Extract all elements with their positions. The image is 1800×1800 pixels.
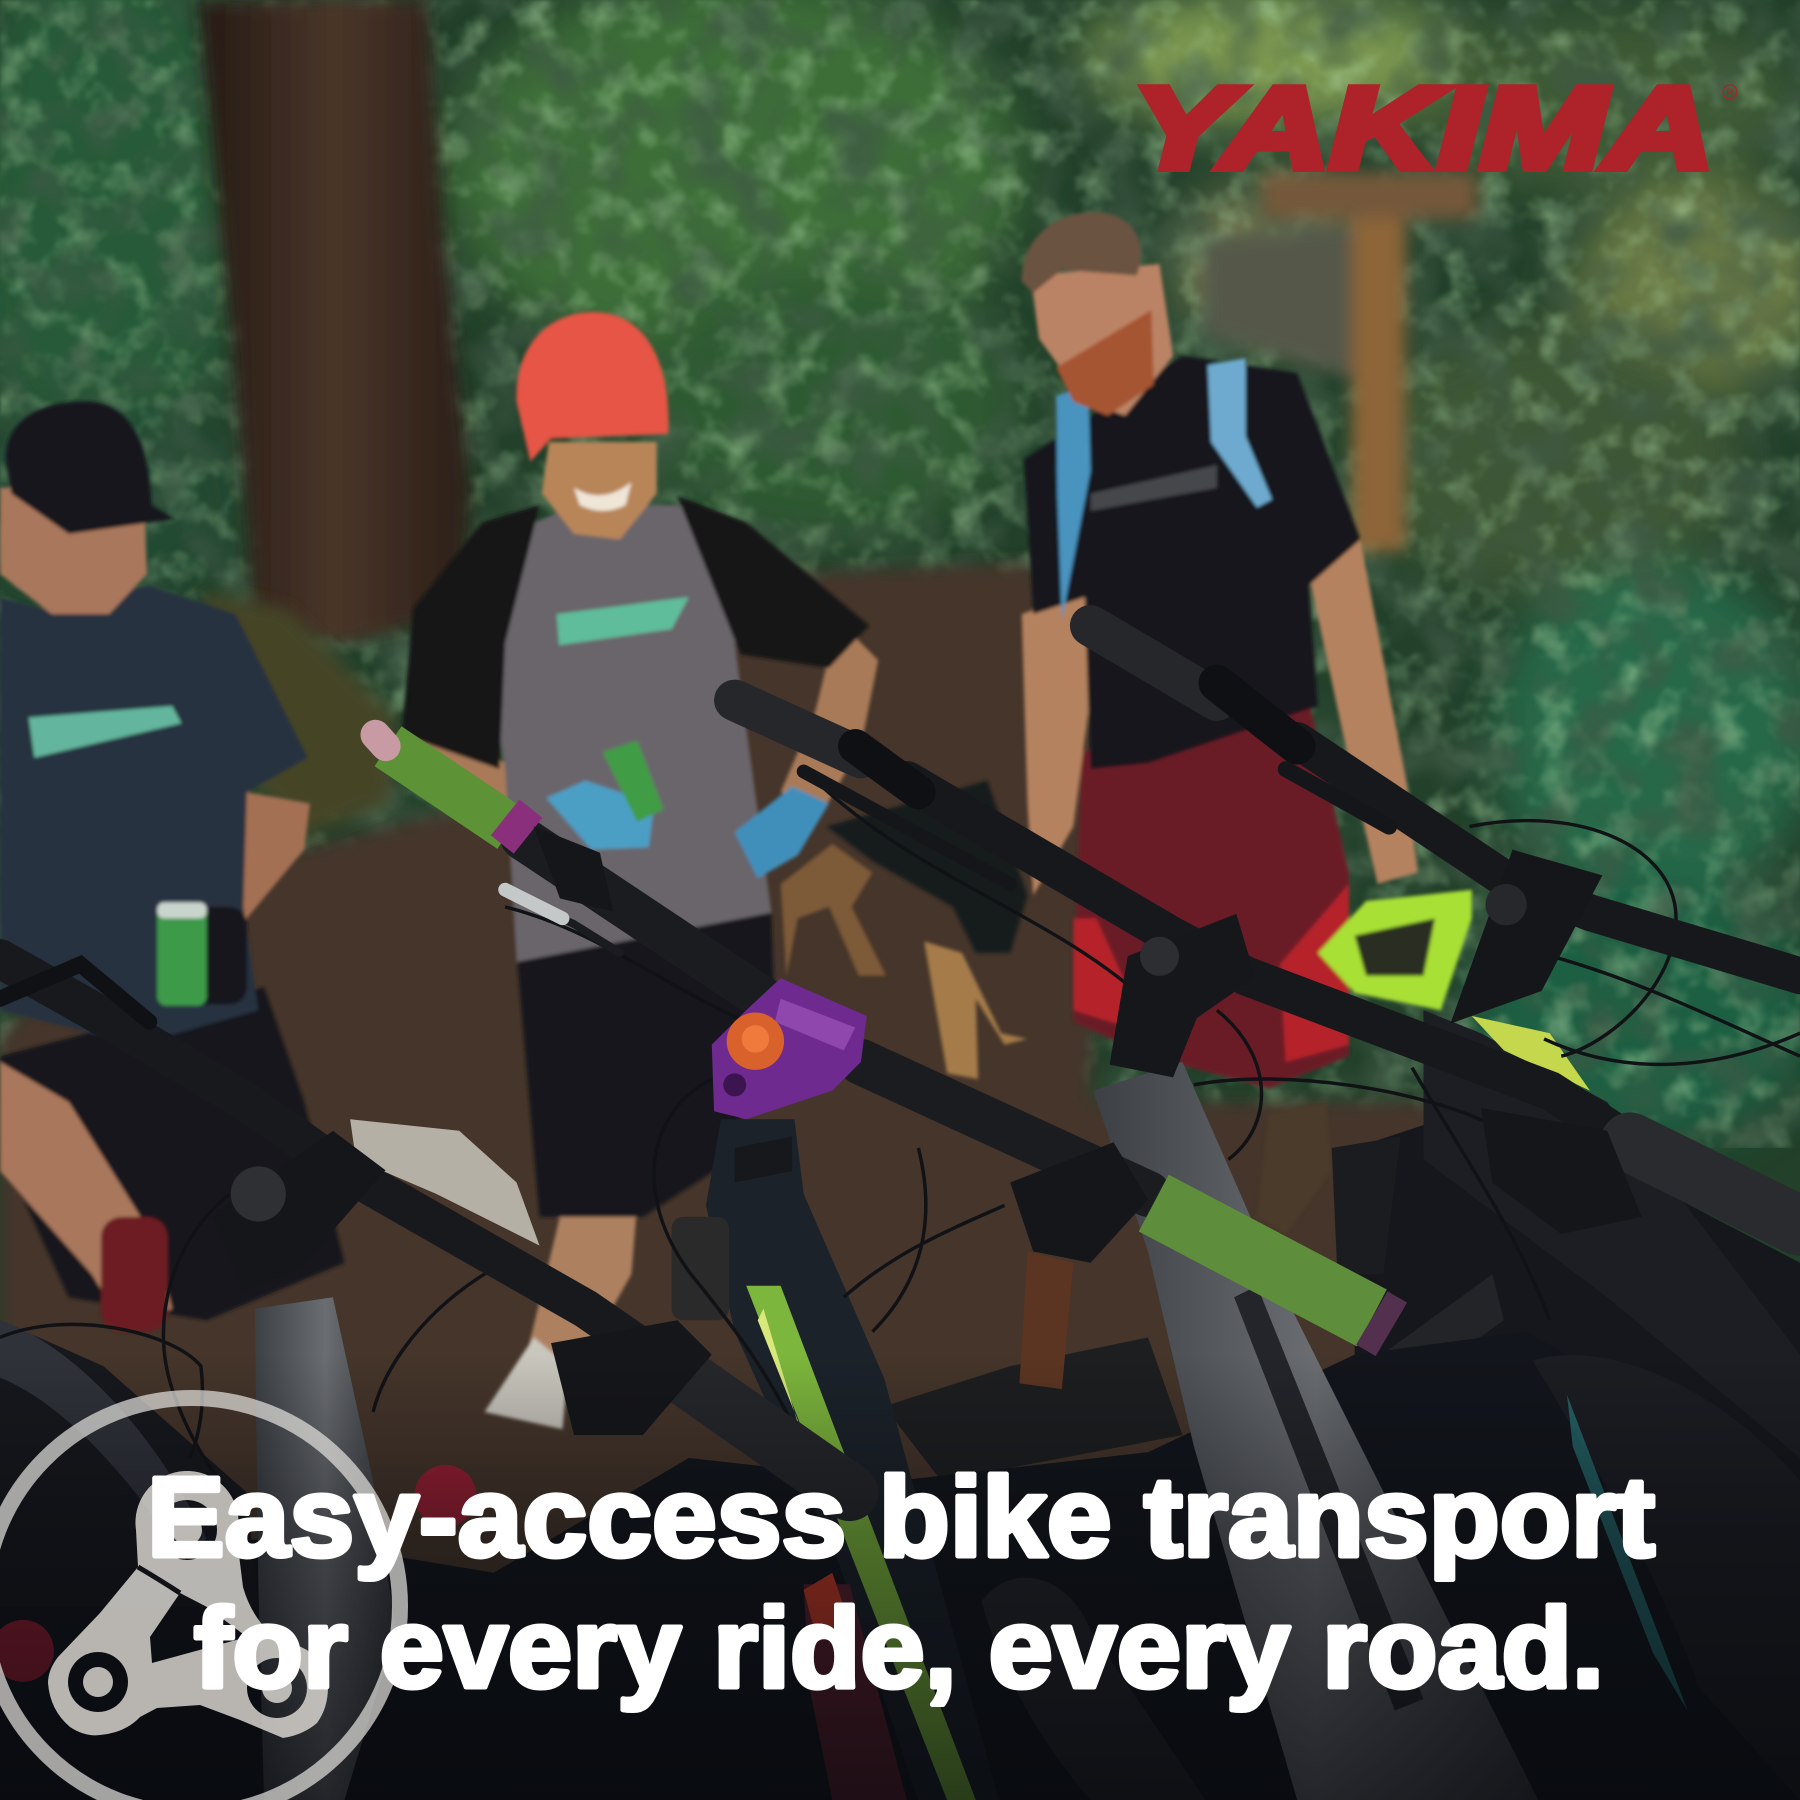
badge: chain link in a ring [0, 1398, 400, 1800]
dark gradient behind headline [0, 1355, 1800, 1800]
tree trunk [197, 0, 471, 643]
bike frames [255, 1010, 1800, 1800]
person: right rider with backpack [1022, 212, 1472, 1234]
brake cables [0, 769, 1800, 1515]
logo: YAKIMA wordmark: YAKIMA [1132, 63, 1714, 193]
handlebar: central bike with green grips and purple stem [375, 735, 1391, 1329]
dog [781, 781, 1027, 1079]
purple stem clamp [712, 978, 867, 1119]
handlebar: second bike [735, 700, 1800, 1234]
headline: for every ride, every road. [194, 1585, 1604, 1711]
mossy rock [201, 591, 396, 838]
handlebar: front left bike [0, 959, 850, 1682]
tyres and dark bags [0, 1102, 1800, 1800]
person: middle rider in red helmet [402, 312, 878, 1429]
person: left rider [0, 402, 344, 1332]
forest floor [0, 563, 1492, 1800]
handlebar: rear right bike [1091, 626, 1800, 1016]
saddle, bottom right [1533, 1355, 1800, 1800]
headline [147, 1454, 1655, 1711]
wooden trail sign [1205, 172, 1477, 551]
central bike down tube [672, 1119, 999, 1800]
headline: Easy-access bike transport [147, 1454, 1655, 1580]
logo: YAKIMA wordmark: R [1726, 88, 1734, 98]
